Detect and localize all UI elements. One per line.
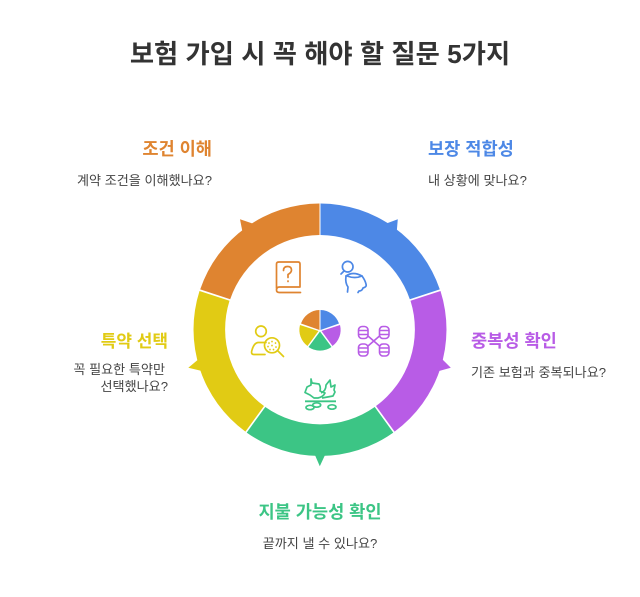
center pie chart — [299, 310, 341, 351]
label: coverage fit: 보장 적합성 — [428, 139, 514, 159]
segment: yellow — [188, 291, 264, 432]
icon: connected databases — [358, 326, 389, 356]
icon: book with question mark — [276, 262, 300, 292]
label: affordability: 끝까지 낼 수 있나요? — [263, 536, 377, 551]
segment: blue — [320, 204, 440, 299]
title: 보험 가입 시 꼭 해야 할 질문 5가지 — [130, 39, 510, 69]
label: coverage fit: 내 상황에 맞나요? — [428, 173, 527, 188]
label: rider selection: 꼭 필요한 특약만 — [73, 362, 165, 377]
label: understand terms — [77, 139, 212, 188]
label: affordability: 지불 가능성 확인 — [258, 502, 382, 522]
label: duplicate coverage — [471, 331, 606, 380]
segment: purple — [376, 291, 451, 432]
label: understand terms: 조건 이해 — [142, 139, 212, 159]
icon: broken piggy bank with coins — [305, 379, 336, 410]
label: coverage fit — [428, 139, 527, 188]
label: duplicate coverage: 기존 보험과 중복되나요? — [471, 365, 606, 380]
icon: head with magnifier — [341, 261, 366, 292]
ring diagram — [188, 204, 451, 466]
label: duplicate coverage: 중복성 확인 — [471, 331, 557, 351]
segment: green — [247, 407, 393, 466]
label: understand terms: 계약 조건을 이해했나요? — [77, 173, 212, 188]
icon: person with magnifier — [252, 326, 284, 356]
segment: orange — [200, 204, 320, 299]
label: rider selection: 특약 선택 — [101, 332, 168, 351]
label: affordability — [258, 502, 382, 551]
label: rider selection: 선택했나요? — [100, 379, 168, 394]
label: rider selection — [73, 332, 168, 394]
